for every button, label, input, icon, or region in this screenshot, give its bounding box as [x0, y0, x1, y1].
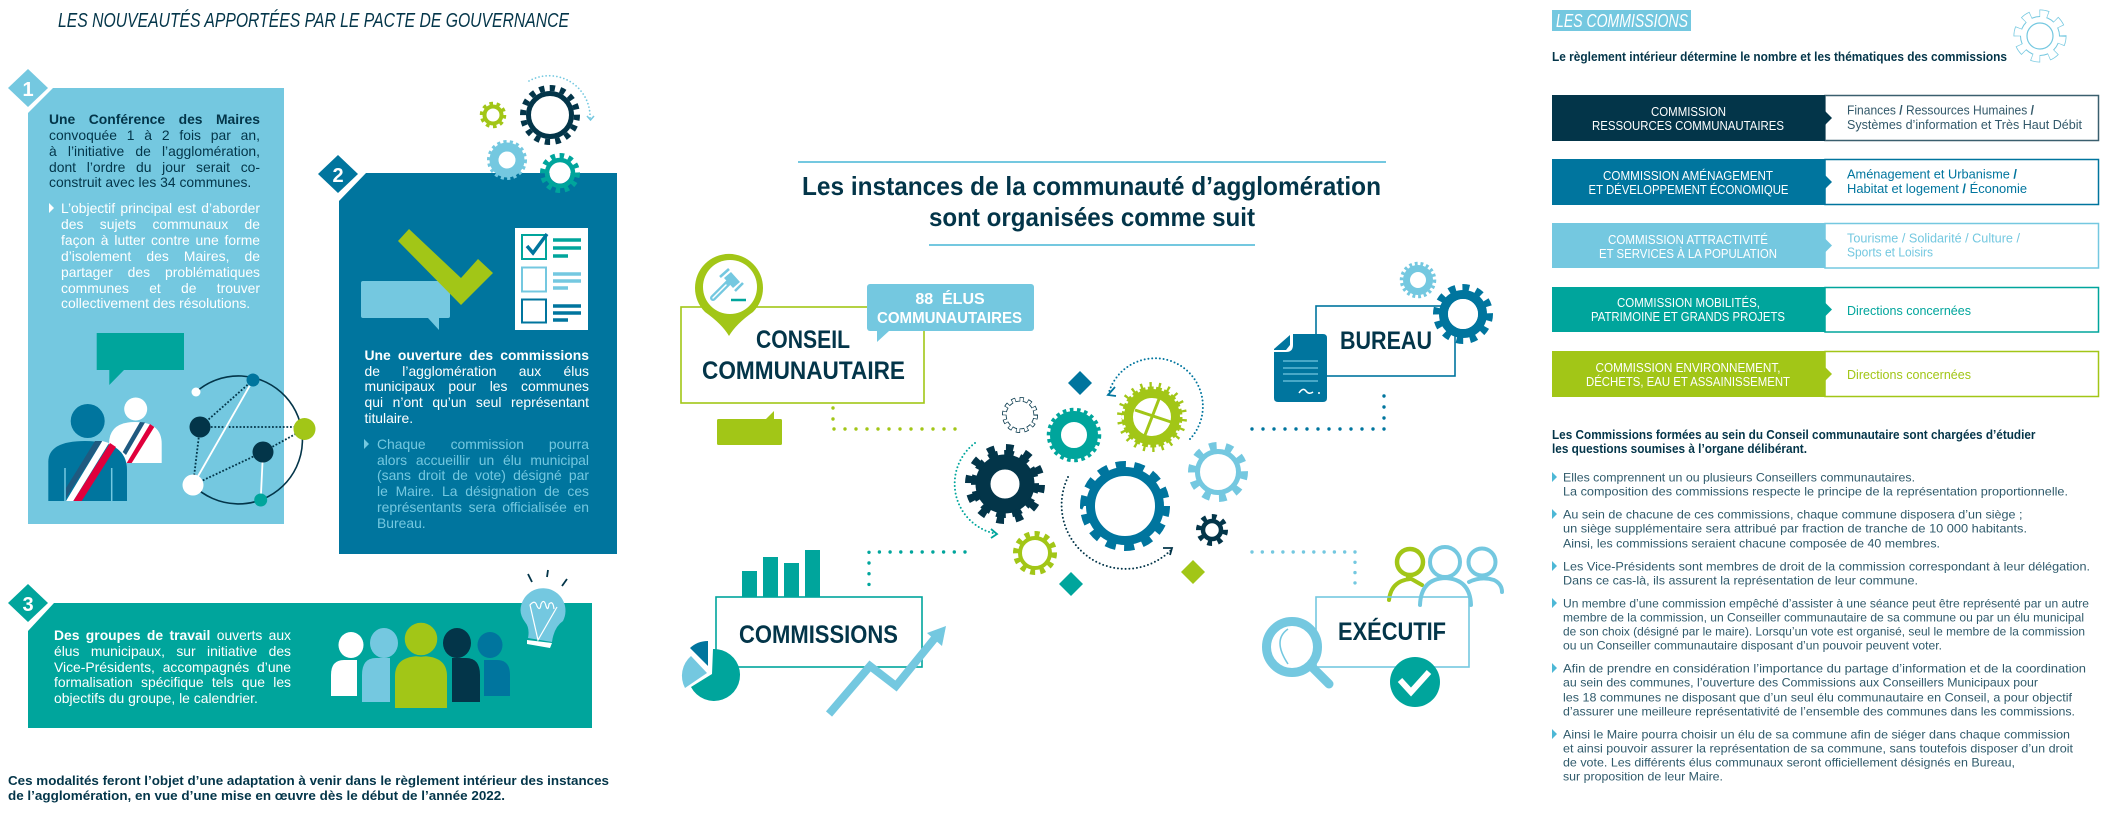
panel 1: conférence des maires: d’isolement des Maires, de — [61, 248, 260, 264]
commissions intro — [1552, 428, 2036, 456]
commission 5: Directions concernées — [1847, 368, 1971, 382]
commission 4: PATRIMOINE ET GRANDS PROJETS — [1591, 310, 1785, 324]
bullet list: Un membre d’une commission empêché d’assister à une séance peut être représenté par un autre — [1563, 596, 2089, 610]
bullet list: de son choix (désigné par le maire). Lorsqu’un vote est organisé, seul le membre de la commission — [1563, 624, 2085, 638]
panel 1: conférence des maires: construit avec les 34 communes. — [49, 174, 251, 190]
conseil communautaire: CONSEIL — [756, 326, 850, 354]
exécutif: EXÉCUTIF — [1338, 617, 1446, 646]
footer note: de l’agglomération, en vue d’une mise en œuvre dès le début de l’année 2022. — [8, 788, 505, 803]
exécutif — [1252, 547, 1502, 707]
footer note — [8, 773, 609, 803]
panel 1: conférence des maires — [8, 69, 316, 524]
callout: 88 élus — [867, 284, 1034, 342]
commission 5: COMMISSION ENVIRONNEMENT, — [1596, 361, 1780, 375]
commission 3: COMMISSION ATTRACTIVITÉ — [1608, 232, 1768, 247]
central title: sont organisées comme suit — [929, 202, 1255, 232]
bullet list: les 18 communes ne disposant que d’un seul élu communautaire en Conseil, a pour objectif — [1563, 690, 2073, 704]
bullet list: ou un Conseiller communautaire disposant d’un pouvoir peuvent voter. — [1563, 638, 1942, 652]
commission 2: Aménagement et Urbanisme / — [1847, 168, 2018, 182]
bureau: BUREAU — [1340, 327, 1432, 355]
bullet list: membre de la commission, un Conseiller communautaire de sa commune ou par un élu municipal — [1563, 610, 2084, 624]
bullet list: Afin de prendre en considération l’importance du partage d’information et de la coordination — [1563, 662, 2086, 676]
callout: 88 élus: COMMUNAUTAIRES — [877, 310, 1022, 327]
commissions — [682, 550, 965, 714]
commission 3: Tourisme / Solidarité / Culture / — [1847, 232, 2021, 246]
commission 5 — [1552, 351, 2098, 397]
panel 1: conférence des maires: partager des problématiques — [61, 264, 260, 280]
panel 2: ouverture des commissions: municipaux pour les communes — [364, 378, 589, 394]
bullet list: de vote. Les différents élus communaux seront officiellement désignés en Bureau, — [1563, 756, 2015, 770]
panel 2: ouverture des commissions: le Maire. La désignation de ces — [377, 483, 589, 499]
central title: Les instances de la communauté d’agglomération — [802, 171, 1381, 201]
panel 2: ouverture des commissions: Chaque commission pourra — [377, 436, 589, 452]
central diagram — [680, 161, 1504, 716]
commission 4: COMMISSION MOBILITÉS, — [1617, 295, 1760, 310]
conseil communautaire: COMMUNAUTAIRE — [702, 357, 905, 385]
bureau — [1252, 264, 1490, 429]
bullet list: Ainsi le Maire pourra choisir un élu de sa commune afin de siéger dans chaque commission — [1563, 728, 2070, 742]
panel 2: ouverture des commissions: de l’agglomération aux élus — [364, 363, 589, 379]
panel 2: ouverture des commissions: qui n’ont qu’un seul représentant — [364, 394, 589, 410]
commission 2 — [1552, 159, 2098, 205]
panel 2: ouverture des commissions — [318, 74, 617, 554]
footer note: Ces modalités feront l’objet d’une adaptation à venir dans le règlement intérieur des instances — [8, 773, 609, 788]
panel 1: conférence des maires: des sujets communaux de — [61, 216, 260, 232]
bullet list: Au sein de chacune de ces commissions, chaque commune disposera d’un siège ; — [1563, 508, 2022, 522]
bullet list: Elles comprennent un ou plusieurs Conseillers communautaires. — [1563, 470, 1915, 484]
commission 3 — [1552, 223, 2098, 268]
panel 3: groupes de travail: Des groupes de travail ouverts aux — [54, 627, 291, 643]
bullet list: Les Vice-Présidents sont membres de droit de la commission correspondant à leur délégation. — [1563, 560, 2090, 574]
panel 3: groupes de travail: formalisation spécifique tels que les — [54, 674, 291, 690]
panel 2: ouverture des commissions: alors accueillir un élu municipal — [377, 452, 589, 468]
panel 1: conférence des maires: façon à lutter contre une forme — [61, 232, 260, 248]
panel 2: ouverture des commissions: représentants sera officialisée en — [377, 499, 589, 515]
commission 4 — [1552, 287, 2098, 332]
commission 4: Directions concernées — [1847, 304, 1971, 318]
commissions intro: les questions soumises à l’organe délibérant. — [1552, 442, 1807, 456]
commissions: COMMISSIONS — [739, 621, 898, 649]
panel 1: conférence des maires: dont l’ordre du jour serait co- — [49, 159, 260, 175]
panel 1: conférence des maires: collectivement des résolutions. — [61, 295, 250, 311]
panel 3: groupes de travail: 3 — [22, 594, 34, 616]
bullet list: d’assurer une meilleure représentativité de l’ensemble des communes dans les commissions. — [1563, 704, 2075, 718]
gears cluster — [955, 358, 1244, 596]
central title — [798, 162, 1386, 245]
panel 2: ouverture des commissions: titulaire. — [364, 410, 413, 426]
bullet list: un siège supplémentaire sera attribué par fraction de tranche de 10 000 habitants. — [1563, 522, 2027, 536]
panel 1: conférence des maires: convoquée 1 à 2 fois par an, — [49, 127, 260, 143]
commission 1: RESSOURCES COMMUNAUTAIRES — [1592, 119, 1784, 133]
panel 3: groupes de travail: Vice-Présidents, accompagnés d’une — [54, 659, 291, 675]
panel 2: ouverture des commissions: Bureau. — [377, 515, 426, 531]
bullet list: Dans ce cas-là, ils assurent la représentation de leur commune. — [1563, 574, 1918, 588]
bullet list — [1552, 470, 2090, 784]
commission 3: Sports et Loisirs — [1847, 246, 1933, 260]
panel 1: conférence des maires: Une Conférence des Maires — [49, 111, 260, 127]
panel 3: groupes de travail — [8, 570, 592, 728]
panel 2: ouverture des commissions: 2 — [332, 165, 344, 187]
panel 1: conférence des maires: L’objectif principal est d’aborder — [61, 200, 260, 216]
panel: les commissions — [1552, 10, 2100, 784]
icon: gavel pin — [695, 254, 763, 336]
icon: outline gear — [2018, 14, 2062, 58]
bullet list: La composition des commissions respecte le principe de la représentation proportionnelle. — [1563, 484, 2068, 498]
commissions intro: Les Commissions formées au sein du Conseil communautaire sont chargées d’étudier — [1552, 428, 2036, 442]
heading badge: LES COMMISSIONS — [1556, 11, 1688, 31]
commission 1: COMMISSION — [1651, 105, 1726, 119]
panel 1: conférence des maires: à l’initiative de l’agglomération, — [49, 143, 260, 159]
bullet list: et ainsi pouvoir assurer la représentation de sa commune, sans toutefois disposer d’un droit — [1563, 742, 2074, 756]
panel 1: conférence des maires: communes et de trouver — [61, 280, 260, 296]
commission 2: Habitat et logement / Économie — [1847, 181, 2027, 196]
commission 1: Systèmes d’information et Très Haut Débit — [1847, 118, 2083, 132]
panel 3: groupes de travail: élus municipaux, sur initiative des — [54, 643, 291, 659]
panel 2: ouverture des commissions: Une ouverture des commissions — [364, 347, 589, 363]
commission 3: ET SERVICES À LA POPULATION — [1599, 246, 1777, 261]
commission 2: COMMISSION AMÉNAGEMENT — [1603, 168, 1773, 183]
bullet list: Ainsi, les commissions seraient chacune composée de 40 membres. — [1563, 536, 1940, 550]
panel 1: conférence des maires: 1 — [22, 79, 34, 101]
commission 1 — [1552, 95, 2098, 141]
bullet list: sur proposition de leur Maire. — [1563, 770, 1723, 784]
subtitle: Le règlement intérieur détermine le nombre et les thématiques des commissions — [1552, 50, 2007, 64]
commission 2: ET DÉVELOPPEMENT ÉCONOMIQUE — [1588, 182, 1788, 197]
panel 3: groupes de travail: objectifs du groupe, le calendrier. — [54, 690, 258, 706]
bullet list: au sein des communes, l’ouverture des Commissions aux Conseillers Municipaux pour — [1563, 676, 2038, 690]
commission 1: Finances / Ressources Humaines / — [1847, 104, 2034, 118]
panel 2: ouverture des commissions: (sans droit de vote) désigné par — [377, 467, 589, 483]
conseil communautaire — [681, 307, 965, 445]
commission 5: DÉCHETS, EAU ET ASSAINISSEMENT — [1586, 374, 1790, 389]
callout: 88 élus: 88 ÉLUS — [915, 289, 985, 308]
